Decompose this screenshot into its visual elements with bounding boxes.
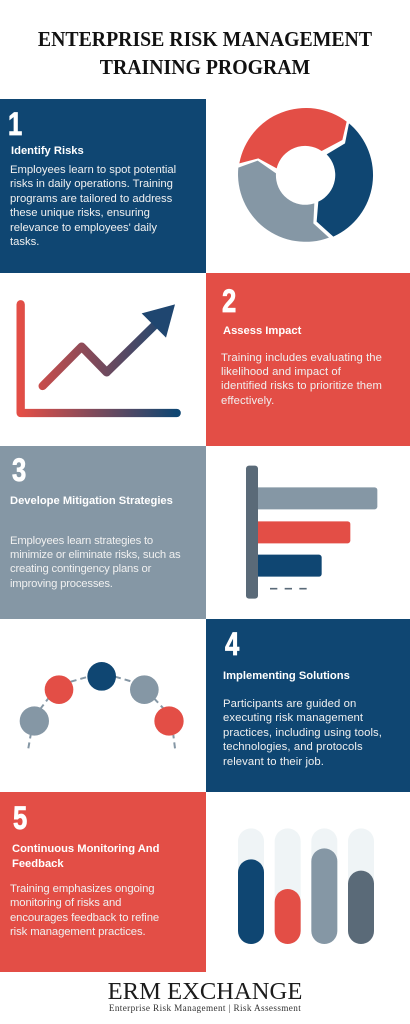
panel: step 1 identify risks [0, 99, 206, 273]
body text [10, 164, 176, 248]
body text: relevant to their job. [223, 756, 324, 768]
body text: monitoring of risks and [10, 897, 121, 909]
number 2: 2 [222, 283, 236, 319]
logo wordmark: ERM EXCHANGE [108, 978, 302, 1005]
panel: step 2 assess impact [206, 273, 410, 446]
title [38, 27, 372, 79]
body text [10, 534, 180, 590]
heading: assess impact: Assess Impact [223, 325, 301, 337]
body text: Employees learn strategies to [10, 534, 153, 546]
icon: cycle donut [238, 108, 374, 242]
body text: creating contingency plans or [10, 563, 151, 575]
body text [223, 698, 382, 768]
body text [221, 352, 382, 407]
heading: continuous monitoring and feedback: Feedback [12, 858, 64, 870]
body text: practices, including using tools, [223, 727, 382, 739]
number 4: 4 [224, 626, 239, 662]
heading: implementing solutions: Implementing Solutions [223, 670, 350, 682]
body text: Training includes evaluating the [221, 352, 382, 364]
body text: improving processes. [10, 578, 113, 590]
body text: encourages feedback to refine [10, 912, 159, 924]
title: TRAINING PROGRAM [100, 55, 310, 79]
body text: technologies, and protocols [223, 741, 363, 753]
number 3: 3 [12, 452, 26, 488]
body text: minimize or eliminate risks, such as [10, 549, 180, 561]
body text: these unique risks, ensuring [10, 207, 150, 219]
body text: risk management practices. [10, 926, 146, 938]
panel: step 3 mitigation strategies [0, 446, 206, 619]
title: ENTERPRISE RISK MANAGEMENT [38, 27, 372, 51]
body text: Participants are guided on [223, 698, 356, 710]
number 1: 1 [8, 106, 22, 142]
body text: identified risks to prioritize them [221, 380, 382, 392]
body text: Employees learn to spot potential [10, 164, 176, 176]
body text: Training emphasizes ongoing [10, 883, 154, 895]
body text: executing risk management [223, 712, 363, 724]
icon: arc of connected dots [20, 662, 184, 748]
logo tagline: Enterprise Risk Management | Risk Assessment [109, 1003, 301, 1013]
body text: programs are tailored to address [10, 193, 172, 205]
number 5: 5 [12, 800, 27, 836]
body text: effectively. [221, 395, 274, 407]
icon: growth line chart [16, 300, 181, 418]
footer logo [108, 978, 302, 1013]
heading: develope mitigation strategies: Develope Mitigation Strategies [10, 494, 173, 506]
heading: continuous monitoring and feedback [12, 843, 159, 870]
heading: continuous monitoring and feedback: Continuous Monitoring And [12, 843, 159, 855]
body text: likelihood and impact of [221, 366, 341, 378]
heading: identify risks: Identify Risks [11, 144, 84, 156]
body text: tasks. [10, 236, 39, 248]
body text: relevance to employees' daily [10, 222, 157, 234]
body text: risks in daily operations. Training [10, 178, 173, 190]
icon: vertical pill bars [238, 828, 374, 944]
panel: step 4 implementing solutions [206, 619, 410, 792]
panel: step 5 continuous monitoring [0, 792, 206, 972]
icon: horizontal bar chart [246, 466, 378, 599]
body text [10, 883, 159, 938]
